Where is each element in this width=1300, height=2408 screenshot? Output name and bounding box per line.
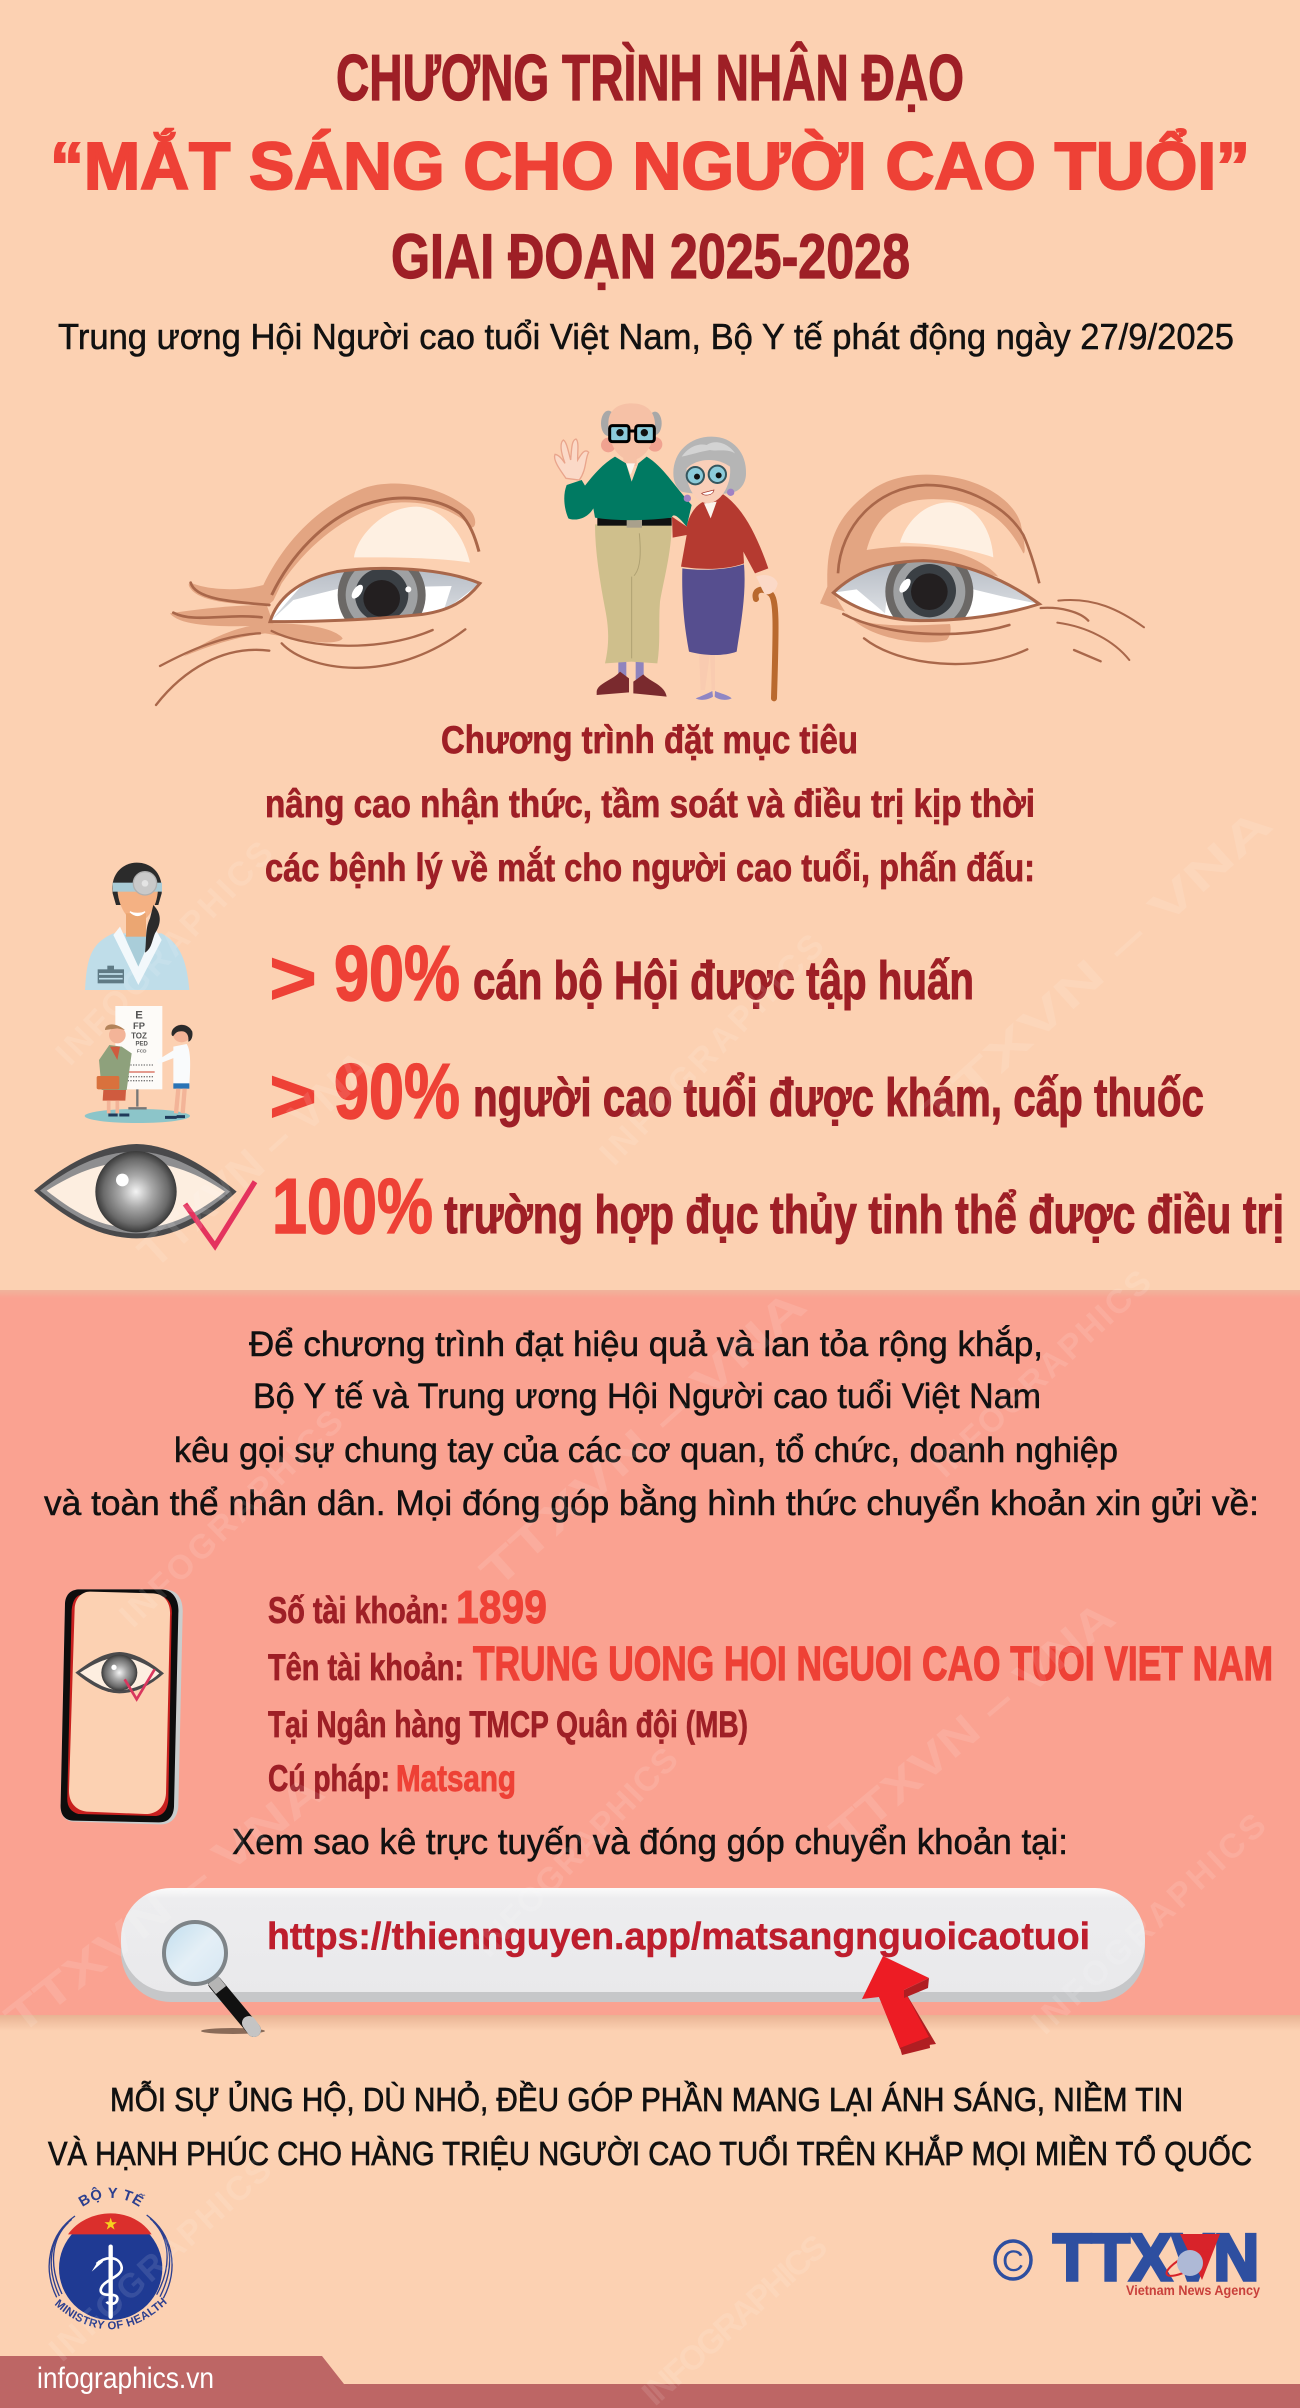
targets intro text: các bệnh lý về mắt cho người cao tuổi, phấn đấu:: [265, 846, 1035, 890]
watermarks: INFOGRAPHICS: [467, 1740, 686, 1965]
watermarks: [0, 799, 1282, 2408]
account details: [268, 1581, 1273, 1799]
syntax: Cú pháp:: [268, 1758, 390, 1799]
footer site name: infographics.vn: [37, 2362, 214, 2395]
statement link lead-in: Xem sao kê trực tuyến và đóng góp chuyển khoản tại:: [232, 1821, 1068, 1862]
cane and hand: [755, 575, 778, 698]
URL text: https://thiennguyen.app/matsangnguoicaotuoi: [267, 1916, 1090, 1958]
watermarks: INFOGRAPHICS: [42, 2150, 279, 2369]
watermarks: INFOGRAPHICS: [112, 1402, 351, 1635]
icon: eye chart exam: FCD: [137, 1049, 147, 1054]
account name: Tên tài khoản:: [268, 1647, 464, 1688]
illustration: right aged eye: [820, 475, 1144, 664]
woman: head: [673, 437, 746, 503]
illustration: left aged eye: [156, 483, 480, 705]
logo text: top: BỘ Y TẾ: [78, 2186, 146, 2207]
arrow pointing at URL: [862, 1956, 936, 2055]
watermarks: TTXVN – VNA: [911, 799, 1282, 1139]
logo: Ministry of Health: ★: [104, 2217, 117, 2232]
watermarks: INFOGRAPHICS: [925, 1263, 1159, 1485]
account number: 1899: [456, 1581, 547, 1633]
footer bar: [0, 2356, 1300, 2408]
account number: [268, 1581, 547, 1633]
closing message: [48, 2081, 1252, 2172]
bank: Tại Ngân hàng TMCP Quân đội (MB): [268, 1704, 748, 1745]
target 1: percent: >: [269, 936, 317, 1021]
title: line 3: GIAI ĐOẠN 2025-2028: [391, 222, 910, 292]
donation call text: Để chương trình đạt hiệu quả và lan tỏa rộng khắp,: [249, 1325, 1043, 1364]
woman: skirt and sweater: [672, 494, 768, 655]
icon: eye doctor: [85, 863, 189, 990]
icon: magnifying glass: [164, 1922, 265, 2034]
man: sweater: [564, 457, 692, 528]
logo: Ministry of Health: [48, 2186, 173, 2330]
targets intro text: [265, 719, 1035, 890]
man: head: [601, 403, 662, 466]
panel: donation call band: [0, 1290, 1300, 2031]
title: line 1: CHƯƠNG TRÌNH NHÂN ĐẠO: [336, 41, 964, 114]
watermarks: INFOGRAPHICS: [1025, 1806, 1274, 2042]
closing message: MỖI SỰ ỦNG HỘ, DÙ NHỎ, ĐỀU GÓP PHẦN MANG LẠI ÁNH SÁNG, NIỀM TIN: [110, 2081, 1183, 2118]
title: line 2: “MẮT SÁNG CHO NGƯỜI CAO TUỔI”: [50, 129, 1250, 204]
agency tagline: Vietnam News Agency: [1126, 2282, 1260, 2298]
syntax: Matsang: [396, 1758, 516, 1799]
watermarks: INFOGRAPHICS: [635, 2227, 835, 2408]
URL pill: [121, 1888, 1145, 2002]
donation call text: [44, 1325, 1259, 1523]
icon: eye chart exam: FP: [133, 1021, 145, 1031]
target 3: percent: 100%: [272, 1162, 433, 1250]
icon: eye chart exam: TOZ: [131, 1031, 147, 1040]
icon: phone with eye: [61, 1589, 183, 1824]
woman: legs: [696, 653, 732, 700]
syntax: [268, 1758, 516, 1799]
watermarks: TTXVN – VNA: [129, 1040, 385, 1277]
icon: eye chart exam: [85, 1006, 193, 1123]
watermarks: INFOGRAPHICS: [592, 927, 832, 1173]
watermarks: TTXVN – VNA: [0, 1765, 333, 2044]
donation call text: Bộ Y tế và Trung ương Hội Người cao tuổi Việt Nam: [253, 1377, 1041, 1416]
man: waving hand: [555, 439, 589, 480]
account number: Số tài khoản:: [268, 1590, 449, 1631]
copyright mark: C: [1002, 2245, 1024, 2278]
target 2: percent: 90%: [334, 1047, 460, 1135]
illustration: elderly couple: [555, 403, 778, 700]
icon: cataract eye with check mark: [34, 1144, 255, 1246]
watermarks: TTXVN – VNA: [821, 1592, 1124, 1858]
watermarks: INFOGRAPHICS: [48, 834, 281, 1073]
target 1: percent: 90%: [334, 929, 460, 1017]
watermarks: TTXVN – VNA: [471, 1280, 816, 1597]
targets intro text: nâng cao nhận thức, tầm soát và điều trị kịp thời: [265, 783, 1035, 826]
target 1: text: cán bộ Hội được tập huấn: [473, 951, 974, 1011]
man: legs and shoes: [595, 524, 672, 697]
icon: eye chart exam: E: [135, 1009, 143, 1021]
icon: eye chart exam: PED: [136, 1042, 148, 1048]
target 2: percent: [269, 1047, 460, 1139]
copyright mark: [995, 2241, 1031, 2279]
logo text: bottom: MINISTRY OF HEALTH: [54, 2297, 167, 2330]
donation call text: kêu gọi sự chung tay của các cơ quan, tổ chức, doanh nghiệp: [174, 1431, 1118, 1470]
TTXVN wordmark: TTXVN: [1053, 2220, 1259, 2294]
logo: copyright and TTXVN: [995, 2220, 1260, 2298]
target 1: percent: [269, 929, 460, 1021]
target 2: percent: >: [269, 1054, 317, 1139]
donation call text: và toàn thể nhân dân. Mọi đóng góp bằng hình thức chuyển khoản xin gửi về:: [44, 1484, 1259, 1523]
targets intro text: Chương trình đặt mục tiêu: [441, 719, 858, 762]
subtitle: Trung ương Hội Người cao tuổi Việt Nam, Bộ Y tế phát động ngày 27/9/2025: [58, 316, 1234, 357]
